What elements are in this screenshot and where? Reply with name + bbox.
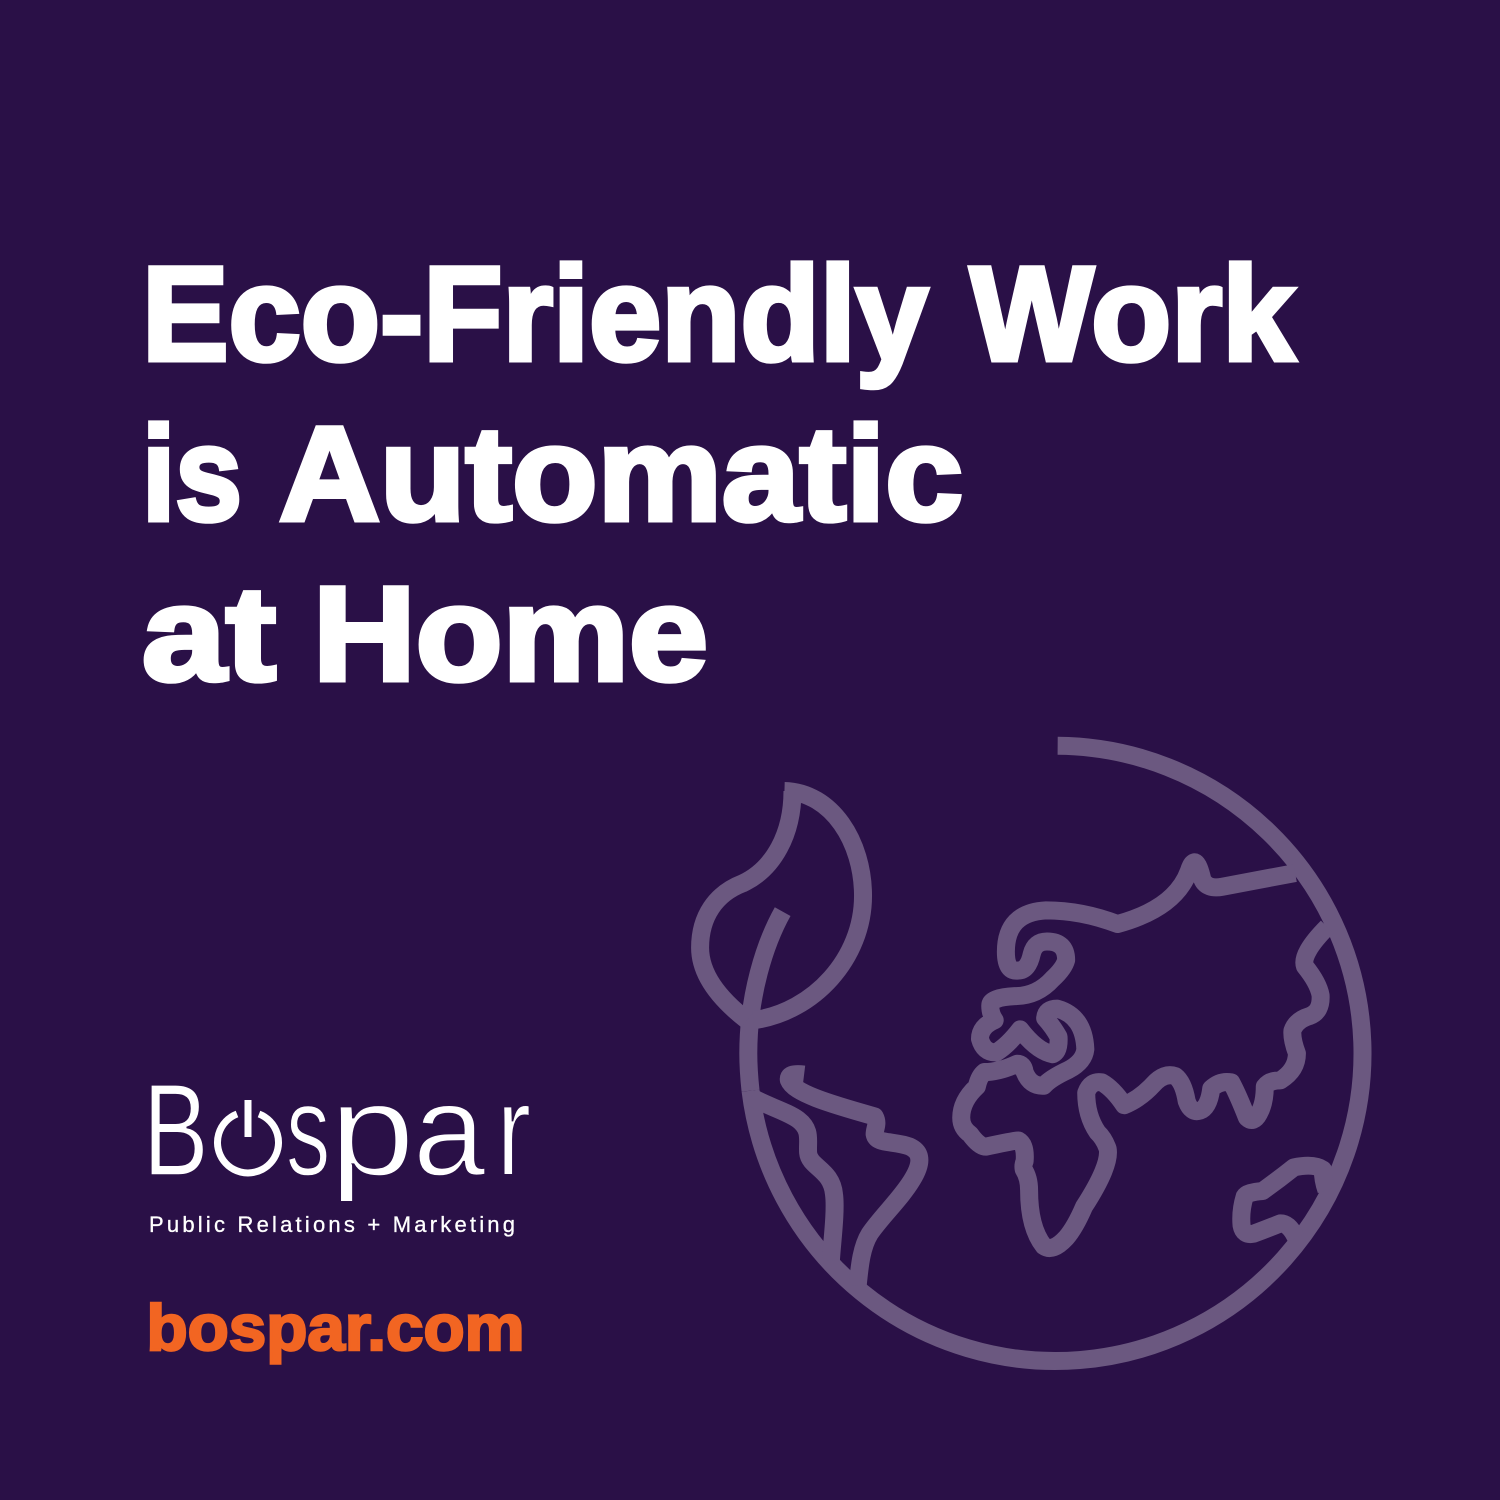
icon: power symbol [218,1100,278,1173]
title: at [142,560,276,709]
logo: Bospar [143,1056,531,1203]
logo letters spar: p [330,1058,415,1203]
leaf stem [748,912,783,1091]
americas west coast [751,1097,835,1261]
tagline: Public Relations + Marketing [149,1212,515,1237]
logo letters spar: a [413,1057,486,1203]
title: Home [313,560,708,709]
website url: bospar.com [146,1291,524,1364]
icon: globe with leaf [700,746,1363,1361]
title [142,240,1295,709]
logo letters spar: s [286,1057,330,1203]
americas coast [789,1074,919,1286]
logo letters spar: r [496,1057,531,1203]
title: Automatic [279,400,963,549]
title: Work [970,240,1295,389]
title: Eco-Friendly [142,240,928,389]
australia [1241,1166,1326,1238]
leaf outline [700,791,863,1020]
logo letter B: B [143,1056,209,1203]
globe outline [751,746,1363,1361]
eurasia and africa [961,862,1327,1248]
title: is [142,400,242,549]
logo letters spar [286,1057,531,1203]
